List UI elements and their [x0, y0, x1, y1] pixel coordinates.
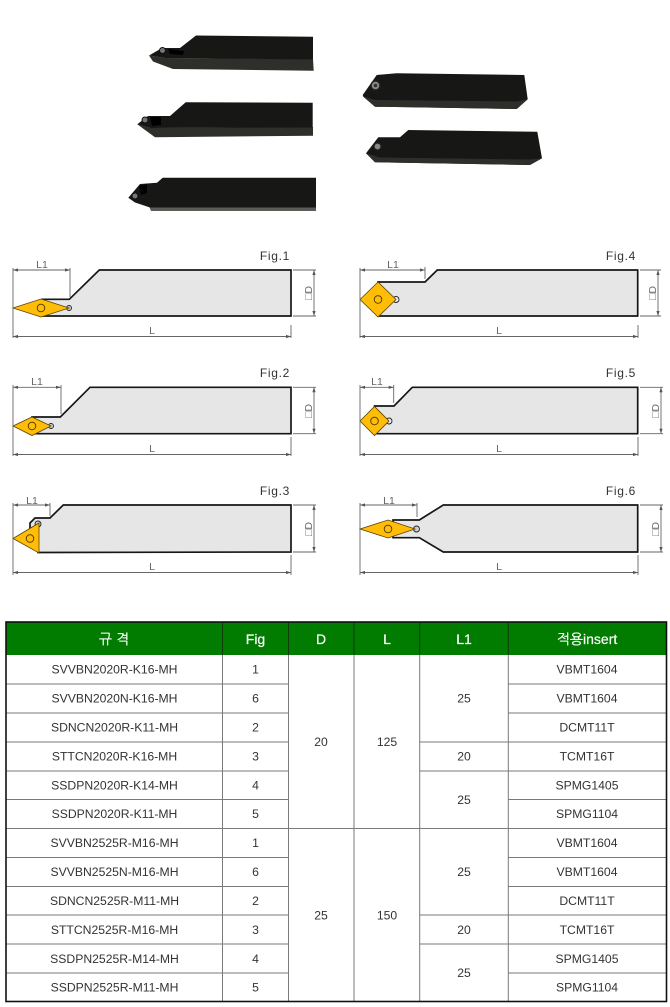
- column: model codes: SSDPN2525R-M11-MH: [51, 980, 178, 994]
- Fig.3 insert: [13, 521, 41, 553]
- Fig.5 dimensions: L1: [371, 376, 383, 388]
- column: applicable insert: DCMT11T: [559, 894, 615, 908]
- Fig.5 outline: [374, 387, 638, 434]
- column: model codes: STTCN2525R-M16-MH: [51, 923, 178, 937]
- column: L: [377, 735, 397, 922]
- column: model codes: SVVBN2525N-M16-MH: [50, 865, 179, 879]
- Fig.4 dimensions: □D: [647, 286, 659, 300]
- Fig.4 dimensions: L: [496, 325, 502, 337]
- column: D: 25: [314, 908, 328, 922]
- table header: D: [316, 631, 326, 647]
- diagram: Fig.2: [13, 366, 316, 456]
- Fig.1 dimensions: [13, 259, 316, 338]
- Fig.5 label: Fig.5: [606, 366, 636, 380]
- column: Fig numbers: 2: [252, 894, 259, 908]
- Fig.3 outline: [30, 505, 291, 552]
- Fig.3 dimensions: L: [149, 561, 155, 573]
- Fig.5 dimensions: [360, 376, 663, 456]
- table header: 적용insert: [557, 631, 617, 647]
- column: Fig numbers: 3: [252, 750, 259, 764]
- diagram: Fig.5: [360, 366, 663, 456]
- column: applicable insert: SPMG1405: [555, 778, 619, 792]
- Fig.3 dimensions: □D: [303, 522, 315, 536]
- column: D: 20: [314, 735, 328, 749]
- Fig.2 dimensions: [13, 376, 316, 456]
- Fig.6 insert: [360, 520, 420, 538]
- Fig.6 dimensions: [360, 495, 663, 575]
- photo: tool holder 5: [366, 130, 542, 165]
- column: L1: 20: [457, 923, 471, 937]
- Fig.1 outline: [42, 270, 291, 316]
- Fig.5 insert: [360, 406, 392, 436]
- photo: tool holder 2: [137, 102, 313, 137]
- column: Fig numbers: 6: [252, 692, 259, 706]
- diagram: Fig.6: [360, 484, 663, 575]
- Fig.1 dimensions: □D: [303, 286, 315, 300]
- Fig.6 dimensions: □D: [650, 522, 662, 536]
- column: D: [314, 735, 328, 922]
- table header: [6, 622, 666, 655]
- Fig.6 label: Fig.6: [606, 484, 636, 498]
- Fig.3 dimensions: [13, 495, 316, 575]
- diagram: Fig.3: [13, 484, 316, 575]
- column: L: 150: [377, 908, 397, 922]
- column: model codes: SDNCN2525R-M11-MH: [50, 894, 179, 908]
- column: Fig numbers: 1: [252, 836, 259, 850]
- column: model codes: SSDPN2020R-K11-MH: [52, 807, 177, 821]
- column: applicable insert: VBMT1604: [557, 865, 618, 879]
- column: L: 125: [377, 735, 397, 749]
- table header: Fig: [246, 631, 265, 647]
- column: applicable insert: VBMT1604: [557, 692, 618, 706]
- Fig.2 dimensions: L1: [31, 376, 43, 388]
- column: L1: [457, 692, 471, 980]
- column: L1: 25: [457, 966, 471, 980]
- column: applicable insert: TCMT16T: [560, 750, 615, 764]
- column: applicable insert: VBMT1604: [557, 836, 618, 850]
- column: Fig numbers: 6: [252, 865, 259, 879]
- column: applicable insert: TCMT16T: [560, 923, 615, 937]
- photo: tool holder 3: [128, 178, 316, 211]
- Fig.5 dimensions: □D: [650, 404, 662, 418]
- column: Fig numbers: 2: [252, 720, 259, 734]
- column: L1: 20: [457, 750, 471, 764]
- table border: [6, 622, 666, 1002]
- column: model codes: SSDPN2020R-K14-MH: [51, 778, 178, 792]
- Fig.1 insert: [13, 299, 72, 317]
- column: model codes: SVVBN2020R-K16-MH: [52, 662, 178, 676]
- column: model codes: SSDPN2525R-M14-MH: [50, 952, 179, 966]
- Fig.2 outline: [32, 387, 291, 434]
- table header: L1: [456, 631, 472, 647]
- column: model codes: STTCN2020R-K16-MH: [52, 750, 177, 764]
- Fig.6 outline: [393, 505, 638, 552]
- column: applicable insert: SPMG1405: [555, 952, 619, 966]
- column: model codes: SDNCN2020R-K11-MH: [51, 720, 178, 734]
- column: applicable insert: SPMG1104: [556, 980, 618, 994]
- column: Fig numbers: 1: [252, 662, 259, 676]
- column: L1: 25: [457, 692, 471, 706]
- column: Fig numbers: [252, 662, 259, 994]
- Fig.4 label: Fig.4: [606, 249, 636, 263]
- Fig.1 dimensions: L1: [36, 259, 48, 271]
- specification table: [6, 622, 666, 1002]
- Fig.2 dimensions: L: [149, 443, 155, 455]
- Fig.2 insert: [13, 417, 54, 436]
- column: applicable insert: DCMT11T: [559, 720, 615, 734]
- Fig.3 dimensions: L1: [26, 495, 38, 507]
- column: model codes: [50, 662, 179, 994]
- column: model codes: SVVBN2020N-K16-MH: [52, 692, 178, 706]
- Fig.3 label: Fig.3: [260, 484, 290, 498]
- table header: L: [383, 631, 391, 647]
- diagram: Fig.1: [13, 249, 316, 338]
- table grid lines: [6, 655, 666, 1002]
- Fig.4 insert: [360, 282, 399, 317]
- photo: tool holder 4: [363, 73, 528, 109]
- column: Fig numbers: 5: [252, 980, 259, 994]
- column: Fig numbers: 3: [252, 923, 259, 937]
- column: applicable insert: VBMT1604: [557, 662, 618, 676]
- Fig.2 dimensions: □D: [303, 404, 315, 418]
- Fig.2 label: Fig.2: [260, 366, 290, 380]
- photo: tool holder 1: [149, 36, 314, 71]
- column: applicable insert: SPMG1104: [556, 807, 618, 821]
- column: Fig numbers: 4: [252, 778, 259, 792]
- column: L1: 25: [457, 865, 471, 879]
- Fig.6 dimensions: L: [496, 561, 502, 573]
- Fig.4 dimensions: L1: [387, 259, 399, 271]
- column: Fig numbers: 4: [252, 952, 259, 966]
- Fig.6 dimensions: L1: [383, 495, 395, 507]
- Fig.4 dimensions: [360, 259, 661, 338]
- column: L1: 25: [457, 793, 471, 807]
- Fig.4 outline: [378, 270, 638, 316]
- column: model codes: SVVBN2525R-M16-MH: [50, 836, 179, 850]
- diagram: Fig.4: [360, 249, 661, 338]
- Fig.1 label: Fig.1: [260, 249, 290, 263]
- column: Fig numbers: 5: [252, 807, 259, 821]
- column: applicable insert: [555, 662, 619, 994]
- Fig.5 dimensions: L: [496, 443, 502, 455]
- table header: 규 격: [99, 632, 129, 647]
- Fig.1 dimensions: L: [149, 325, 155, 337]
